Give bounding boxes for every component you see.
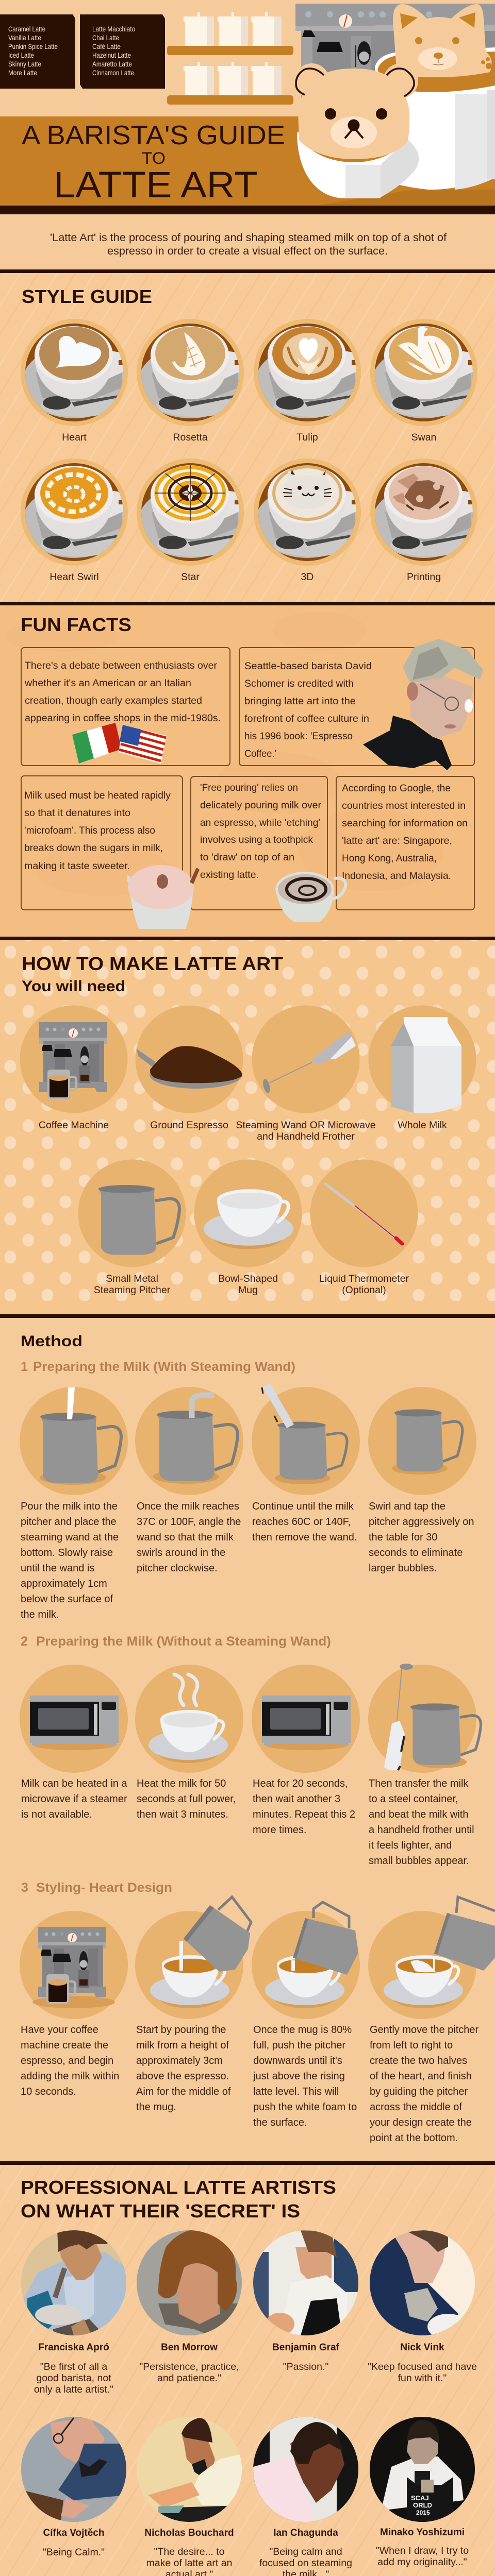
step 1 text: column 1: below the surface of — [21, 1594, 113, 1605]
intro text: 'Latte Art' is the process of pouring and shaping steamed milk on top of a shot of — [50, 232, 447, 244]
heading: artists: ON WHAT THEIR 'SECRET' IS — [21, 2200, 300, 2222]
item labels: Liquid Thermometer — [319, 1273, 409, 1284]
step 3 text: column 2: the mug. — [136, 2102, 176, 2113]
cup: heart swirl — [21, 459, 128, 566]
espresso machine — [295, 4, 495, 107]
step 2 text: column 3: Heat for 20 seconds, — [253, 1778, 348, 1789]
artist: Minako Yoshizumi — [370, 2417, 475, 2568]
artist: Nick Vink — [368, 2229, 477, 2384]
step 3 text: column 1 — [21, 2024, 119, 2097]
step 3 text: column 4 — [370, 2024, 479, 2144]
artist: Franciska Apro: good barista, not — [36, 2372, 111, 2384]
menu board: left: Punkin Spice Latte — [8, 42, 58, 50]
step 2 text: column 4: it feels lighter, and — [369, 1840, 452, 1851]
title band — [0, 116, 495, 206]
artist: Ian Chagunda: Ian Chagunda — [273, 2528, 338, 2538]
artist: Ian Chagunda — [253, 2417, 362, 2576]
section: how to make latte art — [0, 940, 495, 1314]
icon: bowl mug — [204, 1189, 293, 1249]
back cup with dog — [320, 4, 495, 205]
step 3 text: column 3: push the white foam to — [253, 2102, 357, 2113]
fact: origin debate: whether it's an American or an Italian — [24, 677, 191, 689]
artist: Ben Morrow: "Persistence, practice, — [139, 2361, 239, 2372]
step 1 text: column 3: reaches 60C or 140F, — [252, 1516, 351, 1528]
artist: Ben Morrow — [137, 2229, 242, 2384]
step 2 text: column 3: then wait another 3 — [253, 1793, 340, 1805]
section: method — [20, 1333, 495, 2144]
shelves with jars — [167, 12, 293, 105]
icon: handheld frother — [262, 1032, 356, 1094]
step 3 text: column 2: Start by pouring the — [136, 2024, 226, 2036]
step 3 text: column 3: latte level. This will — [253, 2086, 339, 2097]
step 2 text: column 1 — [21, 1778, 128, 1820]
step 3 text: column 4: across the middle of — [370, 2102, 462, 2113]
step 3 text: column 1: 10 seconds. — [21, 2086, 76, 2097]
heading: artists: PROFESSIONAL LATTE ARTISTS — [21, 2177, 336, 2198]
step 2 text: column 2: Heat the milk for 50 — [137, 1778, 226, 1789]
section: professional latte artists — [0, 2165, 495, 2576]
icon: thermometer — [325, 1184, 402, 1244]
step 1 text: column 4 — [369, 1501, 474, 1574]
menu board: left — [0, 14, 75, 89]
icon: coffee with swirl — [275, 872, 345, 922]
artist: Minako Yoshizumi: ORLD — [413, 2501, 432, 2509]
fact: David Schomer: Coffee.' — [244, 748, 276, 759]
fact: David Schomer: forefront of coffee culture in — [244, 713, 369, 724]
fact: heating milk — [21, 776, 183, 910]
artist: Nick Vink: fun with it." — [398, 2372, 447, 2384]
step 3 text: column 3: downwards until it's — [253, 2055, 342, 2066]
step 3 text: column 4: point at the bottom. — [370, 2132, 458, 2144]
step 1 text: column 1: Pour the milk into the — [21, 1501, 118, 1512]
style labels: Star — [181, 571, 200, 583]
menu board: left: More Latte — [8, 69, 37, 77]
step 1 text: column 3: then remove the wand. — [252, 1532, 357, 1543]
header illustration: menu boards, shelves, machine, bear cups — [0, 4, 495, 214]
step 3 text: column 4: Gently move the pitcher — [370, 2024, 479, 2036]
menu board: right: Cinnamon Latte — [92, 69, 134, 77]
artist: Nicholas Bouchard: Nicholas Bouchard — [144, 2528, 234, 2538]
cup: star — [137, 459, 244, 566]
artist: Cifka Vojtech: "Being Calm." — [43, 2547, 105, 2558]
step 2 text: column 2 — [137, 1778, 236, 1820]
step 3 text: column 2: approximately 3cm — [136, 2055, 223, 2066]
artist: Franciska Apro — [21, 2224, 126, 2395]
step 2 text: column 4: to a steel container, — [369, 1793, 458, 1805]
step 2 text: column 4 — [369, 1778, 474, 1867]
artist: Benjamin Graf: Benjamin Graf — [272, 2342, 340, 2353]
step 1 text: column 1: bottom. Slowly raise — [21, 1547, 113, 1558]
fact: heating milk: so that it denatures into — [24, 807, 130, 819]
step 2 heading: Preparing the Milk (Without a Steaming Wand) — [36, 1634, 331, 1649]
artist: Nicholas Bouchard: "The desire... to — [154, 2546, 225, 2557]
artist: Nick Vink: "Keep focused and have — [368, 2361, 477, 2372]
section: style guide — [0, 274, 495, 602]
step 1 text: column 1: steaming wand at the — [21, 1532, 119, 1543]
fact: free pouring: an espresso, while 'etching' — [200, 817, 320, 828]
step 1 text: column 3 — [252, 1501, 357, 1543]
step 2 text: column 3 — [253, 1778, 355, 1836]
style labels: Printing — [407, 571, 441, 583]
heading: fun facts: FUN FACTS — [21, 614, 131, 635]
step 2 text: column 4: Then transfer the milk — [369, 1778, 469, 1789]
cup: heart — [21, 319, 128, 426]
fact: Google trends: Hong Kong, Australia, — [342, 853, 437, 864]
step 3 text: column 3: Once the mug is 80% — [253, 2024, 352, 2036]
item labels: Steaming Wand OR Microwave — [236, 1120, 376, 1131]
title: LATTE ART — [54, 165, 258, 206]
step 3 text: column 1: adding the milk within — [21, 2071, 119, 2082]
step 1 text: column 1: the milk. — [21, 1609, 59, 1620]
style labels: Rosetta — [173, 432, 208, 443]
fact: Google trends: 'latte art' are: Singapore, — [342, 835, 452, 846]
step 3 text: column 2 — [136, 2024, 231, 2113]
fact: David Schomer: Seattle-based barista David — [244, 660, 372, 672]
step 3 text: column 1: espresso, and begin — [21, 2055, 113, 2066]
menu board: right: Amaretto Latte — [92, 60, 132, 68]
step 3 text: column 4: from left to right to — [370, 2040, 453, 2051]
menu board: left: Vanilla Latte — [8, 33, 41, 42]
step 1 text: column 2: swirls around in the — [137, 1547, 225, 1558]
step 1 text: column 2: pitcher clockwise. — [137, 1563, 218, 1574]
step 1 illustrations — [20, 1383, 476, 1495]
fact: origin debate: There's a debate between enthusiasts over — [25, 660, 217, 671]
item labels: Coffee Machine — [39, 1120, 109, 1131]
heading: how to make: HOW TO MAKE LATTE ART — [22, 953, 283, 974]
step 1 text: column 2 — [136, 1501, 241, 1574]
subheading: you will need: You will need — [22, 978, 125, 995]
fact: Google trends — [336, 776, 474, 910]
item labels: Steaming Pitcher — [94, 1284, 171, 1296]
icon: coffee machine — [39, 1022, 107, 1099]
step 3 text: column 1: Have your coffee — [21, 2024, 98, 2036]
fact: David Schomer — [239, 648, 474, 766]
artist: Benjamin Graf — [253, 2230, 360, 2372]
artist: Benjamin Graf: "Passion." — [283, 2361, 328, 2372]
fact: heating milk: making it taste sweeter. — [24, 860, 130, 872]
fact: heating milk: 'microfoam'. This process also — [24, 825, 155, 836]
step 3 heading: 3 — [21, 1880, 28, 1895]
front cup with bear — [294, 63, 419, 198]
section: fun facts — [0, 605, 495, 937]
artist: Franciska Apro: only a latte artist." — [34, 2384, 113, 2395]
intro text: espresso in order to create a visual effect on the surface. — [107, 245, 388, 257]
menu board: right: Latte Macchiato — [92, 25, 135, 33]
heading: artists — [21, 2177, 336, 2222]
item labels: (Optional) — [342, 1284, 386, 1296]
step 1 heading: Preparing the Milk (With Steaming Wand) — [33, 1360, 295, 1374]
artist: Minako Yoshizumi: "When I draw, I try to — [376, 2545, 469, 2556]
artist: Franciska Apro: "Be first of all a — [40, 2361, 107, 2372]
artist: Minako Yoshizumi: 2015 — [416, 2509, 430, 2516]
step 2 text: column 1: Milk can be heated in a — [21, 1778, 128, 1789]
item labels — [39, 1120, 447, 1296]
step 2 text: column 3: minutes. Repeat this 2 — [253, 1809, 355, 1820]
cup: swan — [370, 319, 477, 426]
step 3 text: column 2: Aim for the middle of — [136, 2086, 231, 2097]
fact: free pouring: to 'draw' on top of an — [200, 852, 294, 863]
step 1 text: column 4: larger bubbles. — [369, 1563, 437, 1574]
menu board: right: Café Latte — [92, 42, 121, 50]
step 1 text: column 4: pitcher aggressively on — [369, 1516, 474, 1528]
step 1 text: column 1: until the wand is — [21, 1563, 94, 1574]
style labels: Swan — [411, 432, 436, 443]
fact: free pouring — [191, 776, 327, 910]
dark band — [0, 206, 495, 214]
portrait: David Schomer — [363, 639, 483, 770]
cup: printing — [370, 459, 477, 566]
step 2 text: column 1: microwave if a steamer — [21, 1793, 127, 1805]
style labels — [50, 432, 441, 583]
step 1 text: column 1: pitcher and place the — [21, 1516, 117, 1528]
fact: Google trends: searching for information on — [342, 818, 468, 829]
step 2 illustrations — [20, 1664, 481, 1773]
step 3 text: column 4: create the two halves — [370, 2055, 467, 2066]
step 1 text: column 1: approximately 1cm — [21, 1578, 107, 1589]
menu board: left: Caramel Latte — [8, 25, 45, 33]
step 2 text: column 4: and beat the milk with — [369, 1809, 468, 1820]
menu board: right — [80, 14, 165, 89]
item labels: Ground Espresso — [150, 1120, 228, 1131]
menu board: right: Chai Latte — [92, 33, 119, 42]
artist: Nicholas Bouchard — [137, 2417, 242, 2576]
fact: origin debate — [21, 648, 230, 766]
cup: 3D cat — [254, 459, 361, 566]
style labels: Heart — [62, 432, 87, 443]
fact: free pouring: existing latte. — [200, 869, 259, 880]
artist: Cifka Vojtech: Cífka Vojtěch — [43, 2528, 104, 2538]
step 3 text: column 2: above the espresso. — [136, 2071, 229, 2082]
step 2 heading: 2 — [21, 1634, 28, 1649]
artist: Minako Yoshizumi: SCAJ — [411, 2494, 429, 2502]
step 2 text: column 2: seconds at full power, — [137, 1793, 236, 1805]
icon: hot chocolate — [128, 865, 200, 929]
step 3 text: column 3 — [253, 2024, 357, 2128]
item labels: Whole Milk — [398, 1120, 447, 1131]
step 1 text: column 4: the table for 30 — [369, 1532, 437, 1543]
fact: free pouring: 'Free pouring' relies on — [200, 782, 298, 793]
title — [22, 121, 285, 206]
step 1 text: column 1 — [21, 1501, 119, 1620]
artist: Ian Chagunda: focused on steaming — [259, 2557, 352, 2569]
step 3 text: column 3: the surface. — [253, 2117, 307, 2128]
cup: tulip — [254, 319, 361, 426]
menu board: left: Skinny Latte — [8, 60, 41, 68]
step 3 text: column 1: machine create the — [21, 2040, 108, 2051]
item labels: Bowl-Shaped — [218, 1273, 278, 1284]
step 1 text: column 2: 37C or 100F, angle the — [137, 1516, 241, 1528]
step 1 text: column 3: Continue until the milk — [252, 1501, 354, 1512]
step 3 illustrations — [20, 1897, 495, 2019]
fact: David Schomer: his 1996 book: 'Espresso — [244, 731, 353, 742]
item labels: Mug — [238, 1284, 258, 1296]
fact: Google trends: countries most interested in — [342, 800, 466, 811]
fact: David Schomer: Schomer is credited with — [244, 678, 354, 689]
artist: Nick Vink: Nick Vink — [400, 2342, 444, 2353]
step 3 text: column 4: your design create the — [370, 2117, 472, 2128]
icon: ground espresso — [137, 1046, 242, 1089]
item labels: and Handheld Frother — [257, 1131, 355, 1142]
artist: Ben Morrow: and patience." — [157, 2372, 221, 2384]
style labels: Tulip — [296, 432, 318, 443]
icon: steaming pitcher — [98, 1185, 179, 1255]
icon: milk carton — [391, 1017, 461, 1113]
fact: Google trends: Indonesia, and Malaysia. — [342, 870, 451, 882]
step 1 text: column 2: wand so that the milk — [136, 1532, 234, 1543]
step 1 text: column 4: Swirl and tap the — [369, 1501, 446, 1512]
step 3 text: column 3: just above the rising — [253, 2071, 345, 2082]
fact: David Schomer: bringing latte art into the — [244, 696, 356, 707]
artist: Ian Chagunda: "Being calm and — [269, 2546, 342, 2557]
step 2 text: column 4: small bubbles appear. — [369, 1855, 469, 1867]
title: TO — [142, 149, 166, 167]
cup: rosetta — [137, 319, 244, 426]
step 1 heading: 1 — [21, 1360, 28, 1374]
menu board: left: Iced Latte — [8, 51, 34, 59]
fact: heating milk: breaks down the sugars in milk, — [24, 842, 163, 854]
artist: Franciska Apro: Franciska Apró — [38, 2342, 109, 2353]
heading: style guide: STYLE GUIDE — [22, 286, 152, 307]
step 3 text: column 3: full, push the pitcher — [253, 2040, 345, 2051]
step 2 text: column 1: is not available. — [21, 1809, 92, 1820]
intro text — [50, 232, 447, 257]
item labels: Small Metal — [106, 1273, 158, 1284]
style labels: 3D — [301, 571, 314, 583]
artist: Minako Yoshizumi: Minako Yoshizumi — [380, 2527, 465, 2538]
fact: origin debate: creation, though early examples started — [25, 695, 202, 706]
step 2 text: column 4: a handheld frother until — [369, 1824, 474, 1836]
title: A BARISTA'S GUIDE — [22, 121, 285, 150]
fact: heating milk: Milk used must be heated rapidly — [24, 790, 171, 801]
fact: Google trends: According to Google, the — [342, 783, 451, 794]
step 3 heading: Styling- Heart Design — [36, 1880, 172, 1895]
artist: Minako Yoshizumi: add my originality..." — [377, 2556, 467, 2568]
fact: free pouring: involves using a toothpick — [200, 834, 313, 845]
heading: method: Method — [21, 1333, 82, 1350]
step 3 text: column 4: by guiding the pitcher — [370, 2086, 468, 2097]
step 3 text: column 2: milk from a height of — [136, 2040, 229, 2051]
artist: Nicholas Bouchard: make of latte art an — [146, 2557, 232, 2569]
artist: Cifka Vojtech — [21, 2417, 126, 2558]
menu board: right: Hazelnut Latte — [92, 51, 131, 59]
fact: free pouring: delicately pouring milk over — [200, 800, 321, 811]
style labels: Heart Swirl — [50, 571, 99, 583]
fact: origin debate: appearing in coffee shops in the mid-1980s. — [25, 713, 221, 724]
artist: Ben Morrow: Ben Morrow — [161, 2342, 218, 2353]
step 2 text: column 3: more times. — [253, 1824, 306, 1836]
step 1 text: column 4: seconds to eliminate — [369, 1547, 463, 1558]
step 3 text: column 4: of the heart, and finish — [370, 2071, 472, 2082]
step 1 text: column 2: Once the milk reaches — [137, 1501, 239, 1512]
step 2 text: column 2: then wait 3 minutes. — [137, 1809, 228, 1820]
icon: Italian and American flags — [72, 723, 167, 764]
